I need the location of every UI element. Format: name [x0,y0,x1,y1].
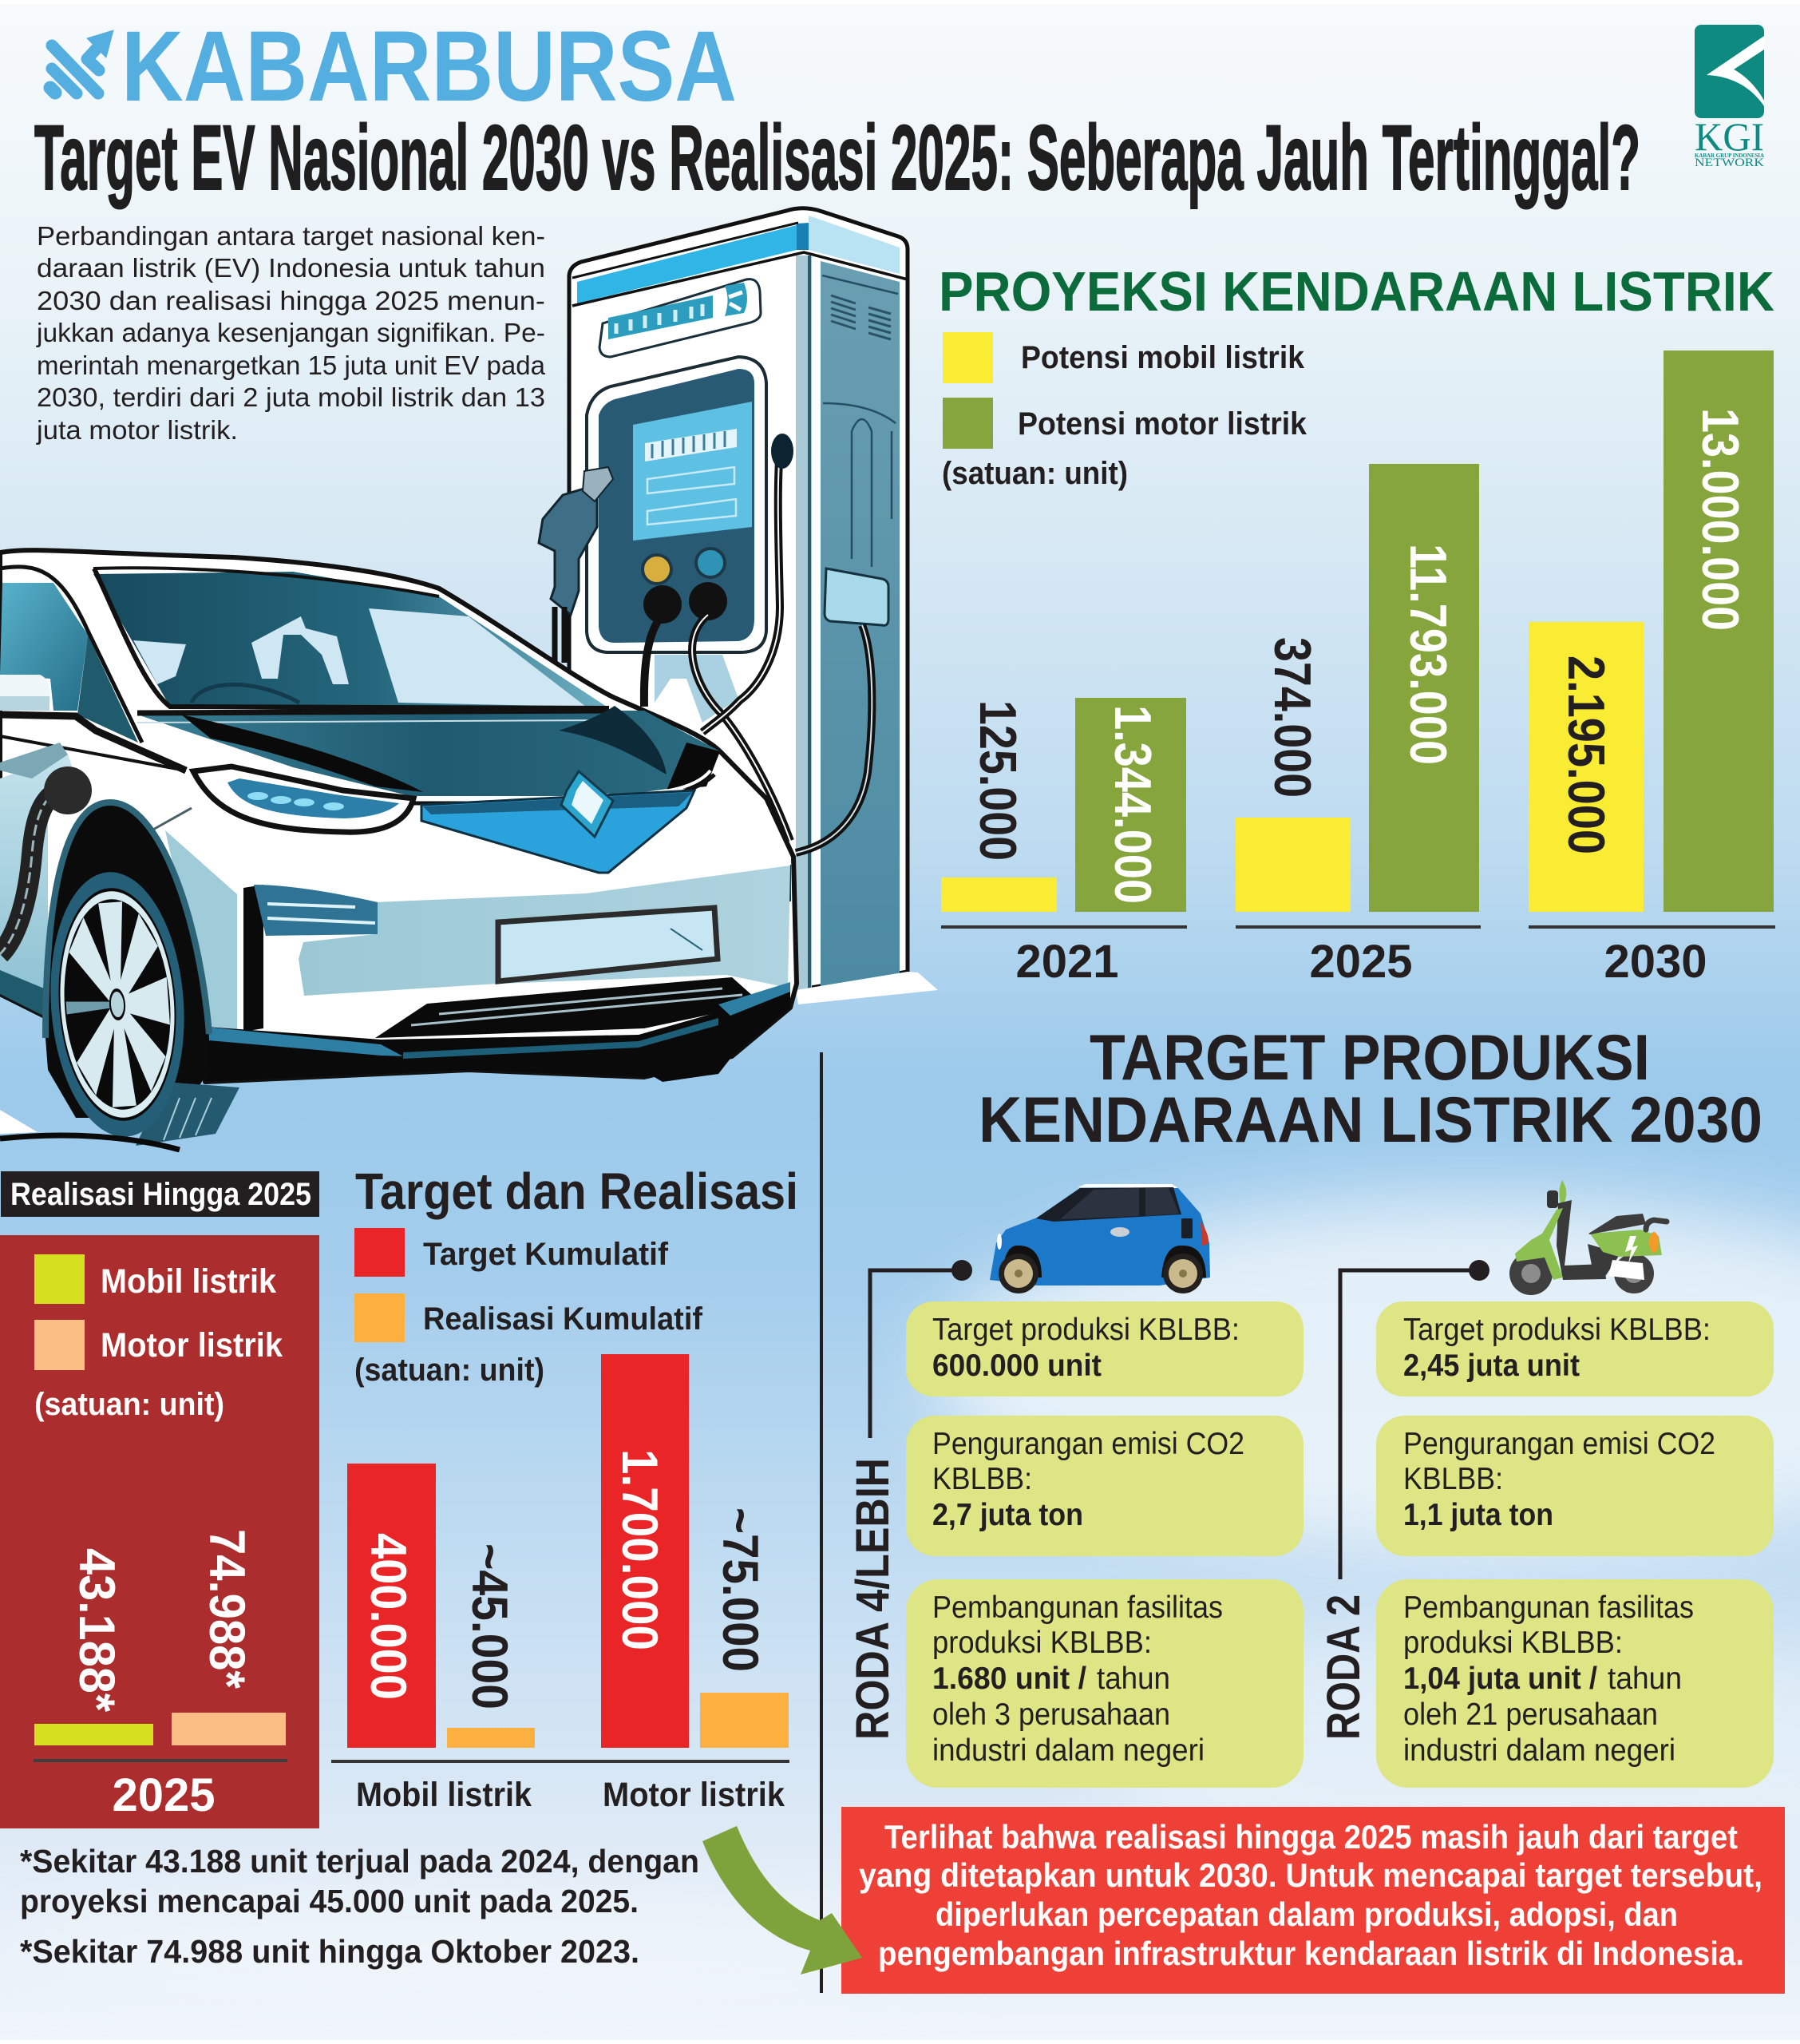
card: fasilitas roda 4: tahun [1097,1662,1170,1696]
logo: KGI Network: NETWORK [1695,156,1764,169]
icon: Kabarbursa arrow [50,30,113,93]
car wheel [42,868,192,1141]
red chart panel: 43.188* [69,1548,125,1712]
car daytime light [243,885,263,1032]
car wheel arch [45,802,209,1118]
card: target produksi roda 4 [906,1301,1304,1396]
car right marker [762,866,790,912]
card: fasilitas roda 4: Pembangunan fasilitas [932,1590,1223,1625]
card: fasilitas roda 4: 1.680 unit / [932,1662,1086,1696]
legend: target [354,1228,703,1388]
card: fasilitas roda 4: industri dalam negeri [932,1733,1205,1768]
logo: KGI Network: KABAR GRUP INDONESIA [1695,153,1764,159]
card: fasilitas roda 2 [1376,1579,1774,1788]
car fender panel [165,830,237,1030]
legend: proyeksi: Potensi mobil listrik [1021,340,1305,375]
legend: target: (satuan: unit) [354,1353,544,1388]
card: fasilitas roda 2: oleh 21 perusahaan [1403,1697,1658,1732]
label: roda 4: RODA 4/LEBIH [847,1458,899,1740]
vertical divider [820,1052,823,1993]
car splitter [196,992,790,1082]
column: roda 2 [1318,1180,1774,1788]
charger cables [644,615,663,707]
bars 2030: 2030 [1604,936,1707,988]
footnotes: *Sekitar 74.988 unit hingga Oktober 2023. [20,1933,639,1970]
card: emisi roda 2: Pengurangan emisi CO2 [1403,1427,1715,1461]
card: fasilitas roda 4: produksi KBLBB: [932,1626,1152,1660]
card: emisi roda 4: KBLBB: [932,1462,1032,1496]
bar chart: target: ~75.000 [712,1507,768,1672]
charger screen panel [587,357,766,652]
bar chart: target: Mobil listrik [356,1776,532,1814]
bar chart: target: 1.700.000 [611,1449,667,1650]
panel: target produksi [847,1022,1774,1788]
bars 2025: 2025 [1309,936,1413,988]
red chart panel [0,1235,319,1828]
card: target produksi roda 4: Target produksi KBLBB: [932,1313,1240,1347]
red chart panel: Motor listrik [101,1326,283,1365]
bar chart: target: ~45.000 [461,1543,517,1709]
card: target produksi roda 2: 2,45 juta unit [1403,1349,1580,1383]
heading: target dan realisasi: Target dan Realisasi [355,1163,798,1220]
card: target produksi roda 2: Target produksi KBLBB: [1403,1313,1711,1347]
car lower grille [375,977,762,1038]
car door panel [0,755,72,998]
heading: target produksi [979,1022,1762,1156]
card: fasilitas roda 2: industri dalam negeri [1403,1733,1675,1768]
car mirror [0,675,50,711]
intro paragraph: daraan listrik (EV) Indonesia untuk tahun [37,253,545,283]
car hood [137,711,720,796]
red chart panel: 74.988* [199,1529,255,1689]
bar chart: target [331,1354,789,1814]
car grille chevron [421,790,694,873]
panel: proyeksi kendaraan listrik [939,260,1775,988]
card: emisi roda 4: Pengurangan emisi CO2 [932,1427,1244,1461]
car body [0,550,797,1082]
car front-under shadow [633,1038,746,1082]
red chart panel: Mobil listrik [101,1262,276,1301]
bar chart: proyeksi [941,351,1775,988]
card: emisi roda 2 [1376,1416,1774,1556]
legend: proyeksi: Potensi motor listrik [1018,406,1307,442]
bar chart: target: 400.000 [360,1533,416,1700]
car charging cable [0,786,80,954]
card: emisi roda 2: KBLBB: [1403,1462,1503,1496]
callout: conclusion [841,1807,1785,1994]
car licence plate [498,908,718,981]
logo: KGI Network [1695,25,1764,169]
charger plug box [825,568,888,625]
icon: blue car [990,1184,1210,1293]
intro paragraph [36,221,546,445]
red chart panel: 2025 [112,1769,216,1821]
card: emisi roda 4: 2,7 juta ton [932,1498,1083,1532]
card: target produksi roda 2 [1376,1301,1774,1396]
bars 2025: 374.000 [1264,637,1322,798]
bars 2030: 2.195.000 [1557,656,1616,854]
illustration: electric car [0,550,797,1150]
connector: roda 4 [870,1260,972,1438]
car tyre tread [136,1082,239,1146]
charger nozzle [539,487,597,615]
legend: target: Realisasi Kumulatif [423,1301,703,1337]
footnotes [20,1843,699,1970]
red chart panel: (satuan: unit) [34,1387,224,1422]
legend: proyeksi: (satuan: unit) [942,456,1128,491]
intro paragraph: Perbandingan antara target nasional ken- [37,221,545,251]
column: roda 4 [847,1184,1304,1788]
heading: target produksi: TARGET PRODUKSI [1090,1022,1650,1094]
card: emisi roda 4 [906,1416,1304,1556]
card: fasilitas roda 4 [906,1579,1304,1788]
charger base [796,972,938,1004]
car badge [561,771,613,837]
intro paragraph: merintah menargetkan 15 juta unit EV pada [37,351,546,380]
charger lower panel [655,655,738,723]
legend: proyeksi [942,332,1307,491]
car windshield [93,572,609,708]
bars 2025: 11.793.000 [1399,544,1458,765]
bars 2025 [1236,464,1481,988]
footnotes: *Sekitar 43.188 unit terjual pada 2024, dengan [20,1843,699,1880]
callout: conclusion: pengembangan infrastruktur kendaraan listrik di Indonesia. [878,1935,1744,1972]
panel: realisasi hingga 2025 [0,1171,319,1828]
callout: conclusion: Terlihat bahwa realisasi hingga 2025 masih jauh dari target [884,1818,1738,1856]
card: emisi roda 2: 1,1 juta ton [1403,1498,1553,1532]
bars 2021 [941,698,1187,988]
footnotes: proyeksi mencapai 45.000 unit pada 2025. [20,1883,639,1919]
charger top band [577,225,797,303]
bars 2030: 13.000.000 [1691,408,1750,631]
card: fasilitas roda 2: Pembangunan fasilitas [1403,1590,1694,1625]
card: fasilitas roda 2: 1,04 juta unit / [1403,1662,1597,1696]
car bumper [299,866,790,996]
card: fasilitas roda 2: tahun [1608,1662,1682,1696]
intro paragraph: jukkan adanya kesenjangan signifikan. Pe- [36,318,545,347]
logo: KGI Network: KGI [1695,114,1764,159]
car belt line [0,715,186,770]
car ground line [0,1135,180,1150]
charger sign [599,279,761,357]
card: fasilitas roda 4: oleh 3 perusahaan [932,1697,1170,1732]
panel: target dan realisasi [331,1163,798,1814]
logo: Kabarbursa: KABARBURSA [121,11,737,122]
car side window and pillar [0,583,88,711]
bars 2021: 125.000 [969,700,1027,861]
icon: green scooter [1509,1180,1667,1295]
bars 2021: 2021 [1015,936,1119,988]
connector: roda 2 [1340,1260,1489,1579]
arrow: green curved to callout [702,1826,862,1975]
card: target produksi roda 4: 600.000 unit [932,1349,1102,1383]
callout: conclusion: diperlukan percepatan dalam produksi, adopsi, dan [936,1895,1678,1933]
intro paragraph: juta motor listrik. [36,415,238,445]
charger side panel [821,261,900,988]
bars 2021: 1.344.000 [1104,705,1162,904]
bar chart: target: Motor listrik [603,1776,785,1814]
heading label: realisasi: Realisasi Hingga 2025 [10,1177,311,1212]
legend: target: Target Kumulatif [423,1237,669,1272]
car headlight [193,766,413,832]
charger body [569,208,908,990]
illustration: charging station [539,208,938,1004]
intro paragraph: 2030 dan realisasi hingga 2025 menun- [37,286,545,315]
card: fasilitas roda 2: produksi KBLBB: [1403,1626,1623,1660]
intro paragraph: 2030, terdiri dari 2 juta mobil listrik dan 13 [37,382,545,412]
bars 2030 [1529,351,1775,988]
label: roda 2: RODA 2 [1318,1594,1370,1740]
